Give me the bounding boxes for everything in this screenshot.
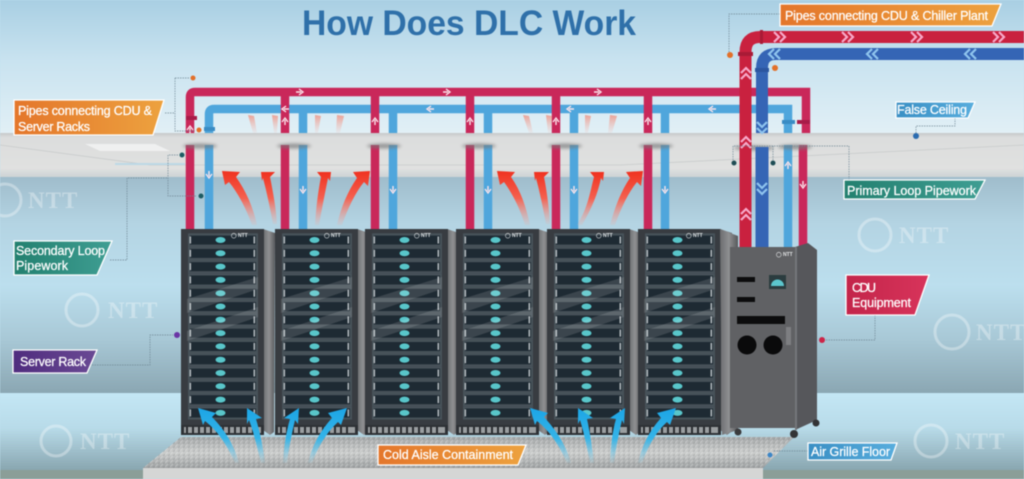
cold air arrows rising from floor xyxy=(198,408,676,463)
server rack 2 xyxy=(275,229,369,435)
label: CDU Equipment: CDU xyxy=(852,281,876,295)
server rack 6 xyxy=(638,229,732,435)
CDU equipment cabinet: ◯ NTT xyxy=(776,252,793,258)
watermarks: NTT: NTT xyxy=(955,429,1005,454)
server racks xyxy=(181,229,738,435)
server rack 2: ◯ NTT xyxy=(324,233,341,239)
label: Secondary Loop Pipework: Secondary Loop xyxy=(16,244,105,258)
label: False Ceiling: False Ceiling xyxy=(897,103,967,117)
label: Cold Aisle Containment xyxy=(378,445,526,465)
secondary loop pipework above ceiling xyxy=(186,92,810,136)
watermarks: NTT: NTT xyxy=(80,429,130,454)
label: Primary Loop Pipework xyxy=(844,180,985,199)
title: How Does DLC Work xyxy=(302,4,637,43)
hot air arrows rising from racks xyxy=(222,171,643,225)
CDU equipment cabinet xyxy=(730,243,820,438)
label: Pipes connecting CDU & Server Racks xyxy=(14,100,164,135)
label: Server Rack xyxy=(13,350,97,373)
label: Primary Loop Pipework: Primary Loop Pipework xyxy=(847,184,977,198)
label: Pipes connecting CDU & Chiller Plant: Pipes connecting CDU & Chiller Plant xyxy=(785,9,989,23)
label: Pipes connecting CDU & Server Racks: Server Racks xyxy=(18,120,90,134)
primary loop pipes to chiller plant xyxy=(738,30,1024,250)
server rack 5: ◯ NTT xyxy=(596,233,613,239)
raised grille floor xyxy=(143,437,794,479)
label: Secondary Loop Pipework: Pipework xyxy=(16,259,69,273)
server rack 5 xyxy=(547,229,641,435)
label: Server Rack: Server Rack xyxy=(20,355,87,369)
watermarks: NTT: NTT xyxy=(108,298,158,323)
label: Pipes connecting CDU & Server Racks: Pipes connecting CDU & xyxy=(18,104,153,118)
label: Secondary Loop Pipework xyxy=(14,241,112,275)
label: CDU Equipment: Equipment xyxy=(852,296,912,310)
ceiling sleeves xyxy=(183,144,812,150)
server rack 1: ◯ NTT xyxy=(231,233,248,239)
server rack 1 xyxy=(181,229,275,435)
label: Pipes connecting CDU & Chiller Plant xyxy=(780,4,1001,26)
server rack 3: ◯ NTT xyxy=(414,233,431,239)
secondary loop pipework below ceiling xyxy=(190,145,803,250)
pipe flow arrows xyxy=(187,32,1004,220)
watermarks: NTT: NTT xyxy=(28,188,78,213)
server rack 4: ◯ NTT xyxy=(505,233,522,239)
false ceiling band xyxy=(0,133,1024,177)
faint heat plumes above ceiling xyxy=(248,115,617,133)
server rack 3 xyxy=(365,229,459,435)
watermarks: NTT: NTT xyxy=(899,223,949,248)
leader lines and dots xyxy=(92,14,955,458)
watermarks: NTT xyxy=(0,184,1024,457)
server rack 4 xyxy=(456,229,550,435)
server rack 6: ◯ NTT xyxy=(686,233,703,239)
label: Air Grille Floor: Air Grille Floor xyxy=(811,445,890,459)
label: Cold Aisle Containment: Cold Aisle Containment xyxy=(383,448,514,462)
label: CDU Equipment xyxy=(846,275,929,315)
